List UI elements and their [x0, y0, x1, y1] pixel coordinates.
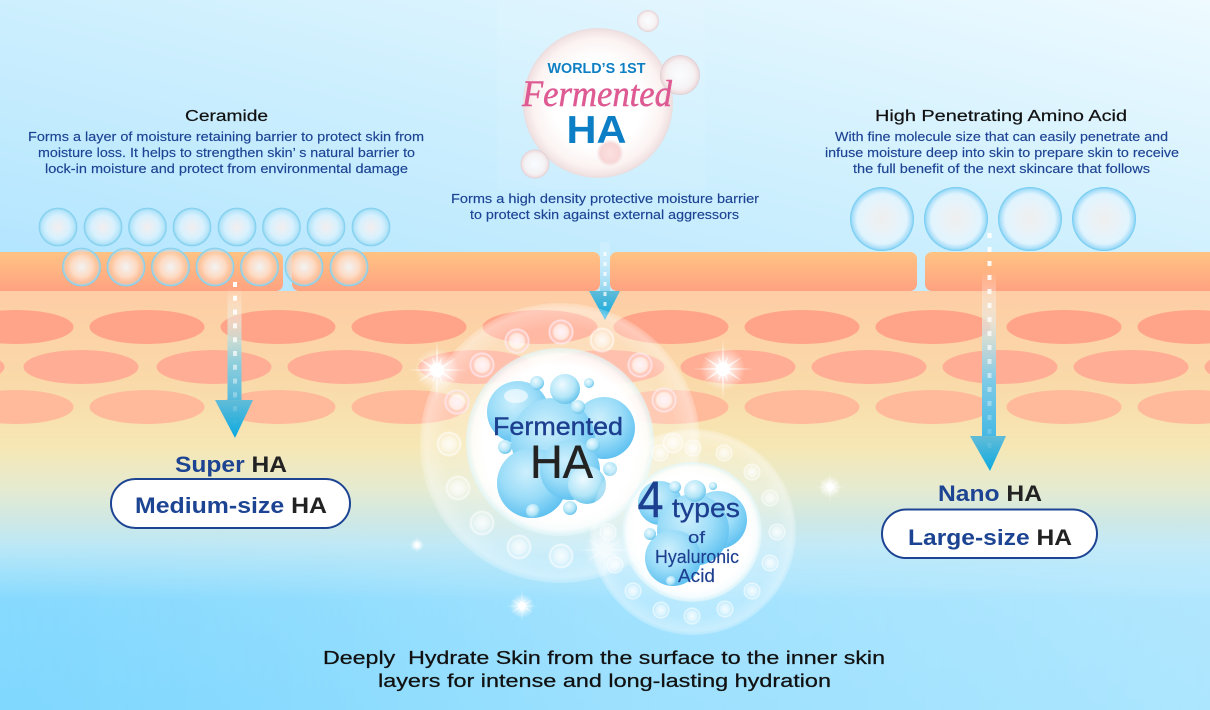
bubble: 4 types of Hyaluronic Acid: of — [688, 528, 705, 547]
bubble: 4 types of Hyaluronic Acid — [590, 429, 796, 635]
bubble: Fermented HA: Fermented — [493, 413, 623, 441]
skin cell ellipses — [0, 310, 1210, 424]
text: ceramide description — [28, 130, 424, 176]
pill: Large-size HA — [882, 510, 1097, 558]
pill: Medium-size HA: Medium-size HA — [135, 493, 327, 518]
badge: World's 1st Fermented HA bubble — [497, 0, 705, 190]
text: ceramide description: moisture loss. It helps to strengthen skin’ s natural barrier to — [38, 146, 415, 160]
pill: Medium-size HA — [111, 479, 350, 528]
badge: World's 1st Fermented HA bubble: HA — [566, 109, 626, 152]
label: Nano HA: Nano HA — [938, 481, 1042, 506]
skin barrier segments — [0, 252, 1210, 291]
amino acid molecules — [850, 187, 1136, 251]
sparkles — [407, 339, 845, 622]
text: fermented HA description: Forms a high density protective moisture barrier — [451, 192, 759, 206]
arrow: amino acid to Nano HA — [970, 233, 1006, 471]
bubble: Fermented HA: HA — [530, 436, 593, 488]
heading: Ceramide: Ceramide — [185, 108, 268, 125]
arrow: ceramide to Super HA — [215, 282, 253, 438]
background: lighter right side of lower area — [260, 545, 1210, 710]
caption: hydration statement: layers for intense and long-lasting hydration — [378, 670, 831, 691]
text: fermented HA description — [451, 192, 759, 222]
arrow: fermented HA into skin — [589, 242, 620, 320]
label: Super HA: Super HA — [175, 452, 287, 477]
text: ceramide description: Forms a layer of moisture retaining barrier to protect skin from — [28, 130, 424, 144]
caption: hydration statement: Deeply Hydrate Skin from the surface to the inner skin — [323, 647, 885, 668]
badge: World's 1st Fermented HA bubble: Fermented — [521, 74, 672, 115]
background: skin layers gradient — [0, 291, 1210, 710]
pill: Large-size HA: Large-size HA — [908, 525, 1072, 550]
text: amino acid description: the full benefit of the next skincare that follows — [853, 162, 1150, 176]
ceramide molecules — [39, 208, 390, 286]
heading: High Penetrating Amino Acid: High Penetrating Amino Acid — [875, 108, 1127, 125]
background: sky — [0, 0, 1210, 292]
text: amino acid description: With fine molecule size that can easily penetrate and — [835, 130, 1168, 144]
bubble: 4 types of Hyaluronic Acid: types — [672, 493, 740, 523]
text: amino acid description: infuse moisture deep into skin to prepare skin to receive — [825, 146, 1179, 160]
caption: hydration statement — [323, 647, 885, 691]
bubble: 4 types of Hyaluronic Acid: 4 — [638, 471, 664, 528]
text: ceramide description: lock-in moisture and protect from environmental damage — [45, 162, 408, 176]
badge: World's 1st Fermented HA bubble: WORLD’S 1ST — [548, 61, 646, 77]
bubble: 4 types of Hyaluronic Acid: Hyaluronic — [655, 546, 739, 567]
text: amino acid description — [825, 130, 1179, 176]
bubble: 4 types of Hyaluronic Acid: Acid — [678, 565, 715, 586]
bubble: Fermented HA — [420, 303, 700, 583]
text: fermented HA description: to protect skin against external aggressors — [470, 208, 739, 222]
